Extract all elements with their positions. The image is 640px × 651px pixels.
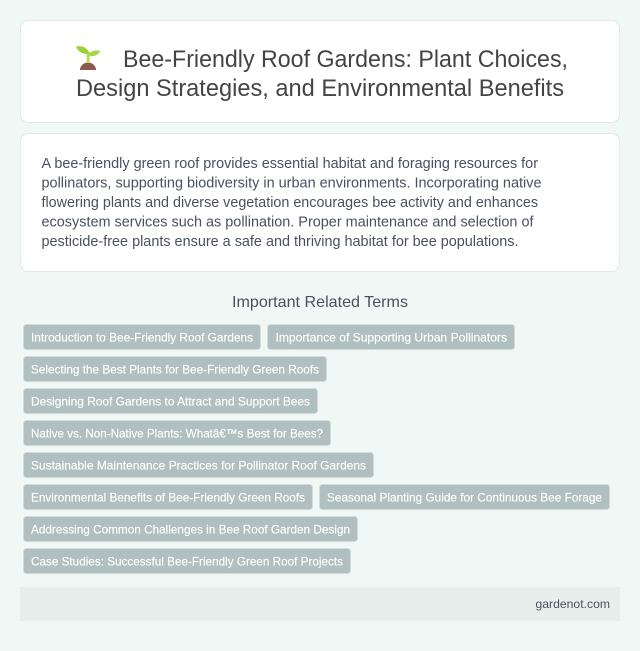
tag: environmental benefits [24, 484, 312, 510]
title [76, 46, 568, 102]
description text: ecosystem services such as pollination. Proper maintenance and selection of [42, 214, 535, 230]
tag: seasonal planting: Seasonal Planting Guide for Continuous Bee Forage [327, 490, 602, 504]
description text: pollinators, supporting biodiversity in urban environments. Incorporating native [42, 176, 542, 192]
tag: introduction: Introduction to Bee-Friendly Roof Gardens [31, 330, 253, 344]
tag: seasonal planting [320, 484, 610, 510]
description text: flowering plants and diverse vegetation encourages bee activity and enhances [42, 195, 538, 211]
tag: common challenges [24, 516, 358, 542]
tag list [24, 324, 610, 574]
tag: designing: Designing Roof Gardens to Attract and Support Bees [31, 394, 310, 408]
description text: A bee-friendly green roof provides essential habitat and foraging resources for [42, 156, 538, 172]
tag: importance [268, 324, 514, 350]
tag: selecting plants: Selecting the Best Plants for Bee-Friendly Green Roofs [31, 362, 319, 376]
tag: native vs non-native: Native vs. Non-Native Plants: Whatâ€™s Best for Bees? [31, 426, 323, 440]
panel: description card [20, 134, 620, 272]
tag: importance: Importance of Supporting Urban Pollinators [276, 330, 507, 344]
tag: environmental benefits: Environmental Benefits of Bee-Friendly Green Roofs [31, 490, 305, 504]
description text: pesticide-free plants ensure a safe and thriving habitat for bee populations. [42, 234, 518, 250]
footer: gardenot.com [536, 597, 610, 611]
tag: introduction [24, 324, 260, 350]
tag: case studies: Case Studies: Successful Bee-Friendly Green Roof Projects [31, 554, 343, 568]
tag: case studies [24, 548, 350, 574]
heading: important related terms: Important Related Terms [232, 294, 408, 311]
description text [42, 156, 542, 250]
panel: title card [20, 20, 620, 122]
tag: native vs non-native [24, 420, 330, 446]
title: Design Strategies, and Environmental Benefits [76, 75, 564, 102]
icon: seedling [76, 46, 100, 70]
tag: sustainable maintenance: Sustainable Maintenance Practices for Pollinator Roof Gardens [31, 458, 366, 472]
tag: sustainable maintenance [24, 452, 374, 478]
tag: designing [24, 388, 318, 414]
tag: common challenges: Addressing Common Challenges in Bee Roof Garden Design [31, 522, 350, 536]
tag: selecting plants [24, 356, 326, 382]
footer [20, 587, 620, 621]
title: Bee-Friendly Roof Gardens: Plant Choices, [123, 46, 568, 73]
